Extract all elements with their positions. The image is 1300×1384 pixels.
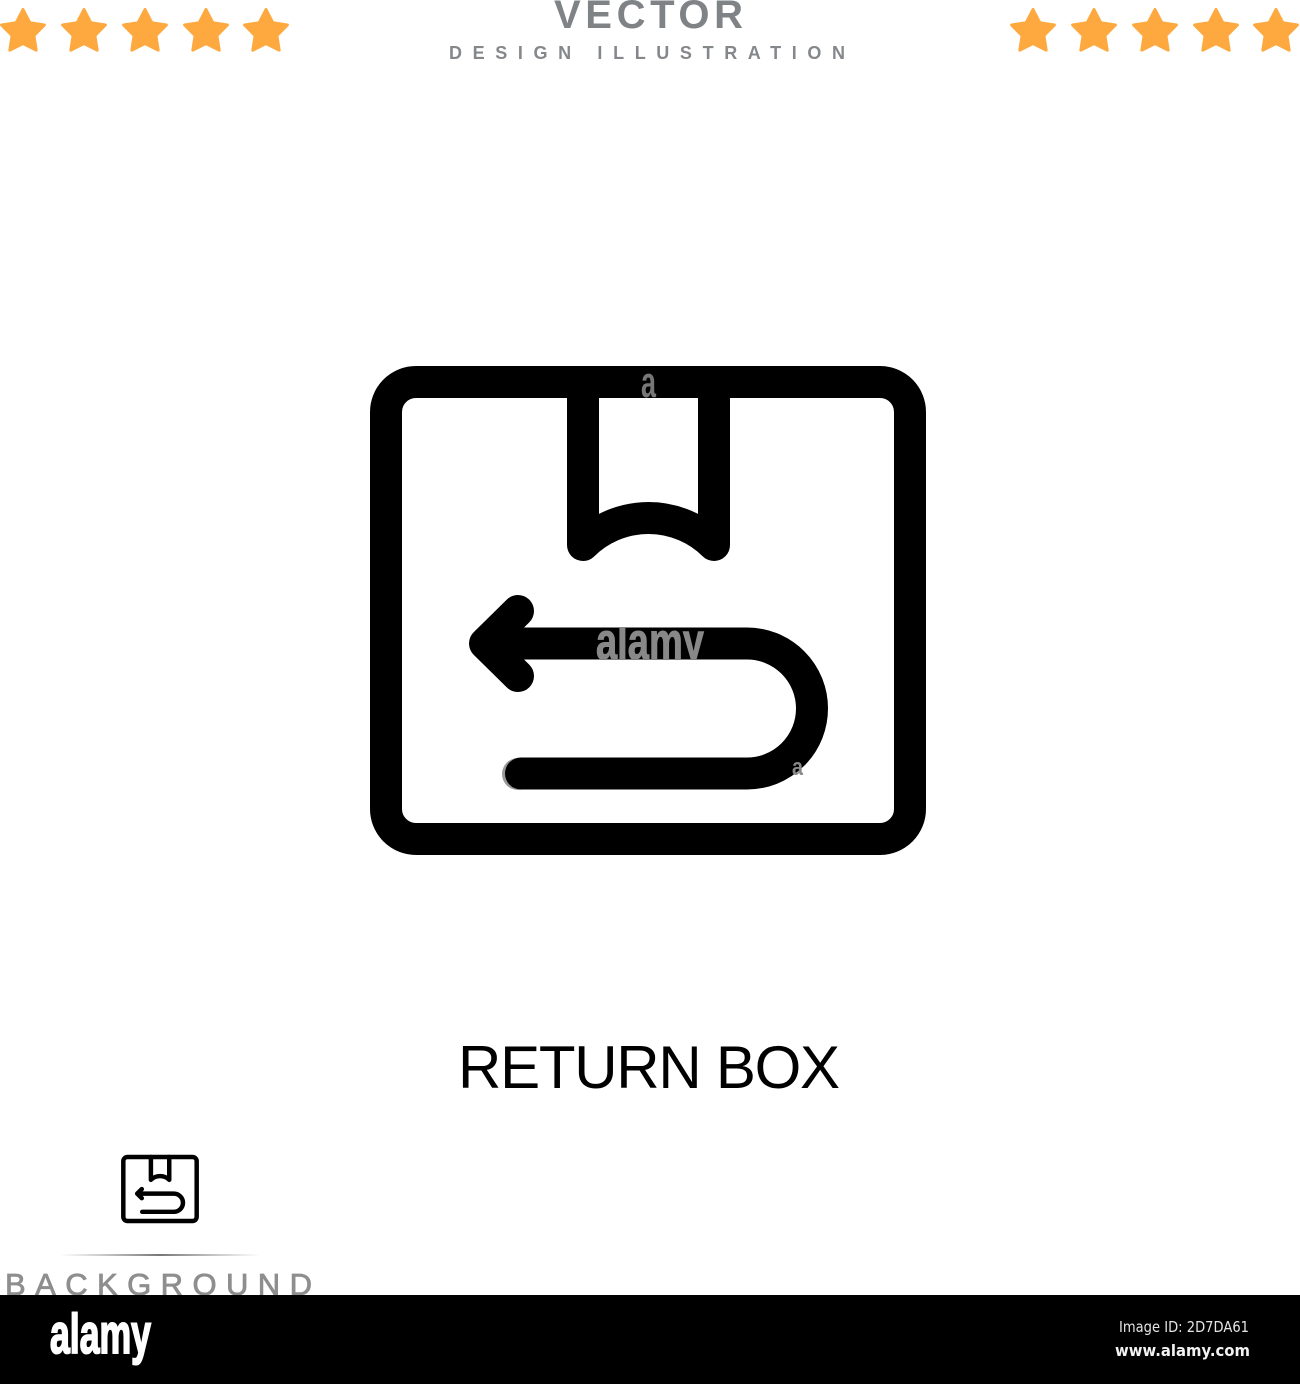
footer logo: alamy: alamy: [50, 1302, 151, 1365]
website: www.alamy.com: [1115, 1341, 1250, 1360]
watermark fragment behind arrow tail: [502, 758, 534, 790]
watermark over icon: a: [641, 358, 656, 407]
watermark over icon: [596, 358, 804, 781]
left star rating: [2, 10, 287, 50]
footer bar: [0, 1295, 1300, 1384]
watermark over icon: alamy: [596, 613, 704, 671]
title: return box: RETURN BOX: [458, 1034, 840, 1101]
tape label: [583, 382, 714, 545]
box outline: [386, 382, 910, 839]
subheading: design illustration: DESIGN ILLUSTRATION: [449, 43, 845, 63]
icon: small return box: [123, 1157, 197, 1221]
icon: return box main: [386, 382, 910, 839]
image id: Image ID: 2D7DA61: [1119, 1318, 1249, 1336]
label: background: BACKGROUND: [5, 1267, 312, 1302]
divider line: [60, 1254, 260, 1256]
return arrow: [485, 611, 812, 774]
watermark over icon: a: [792, 754, 804, 781]
right star rating: [1012, 10, 1297, 50]
